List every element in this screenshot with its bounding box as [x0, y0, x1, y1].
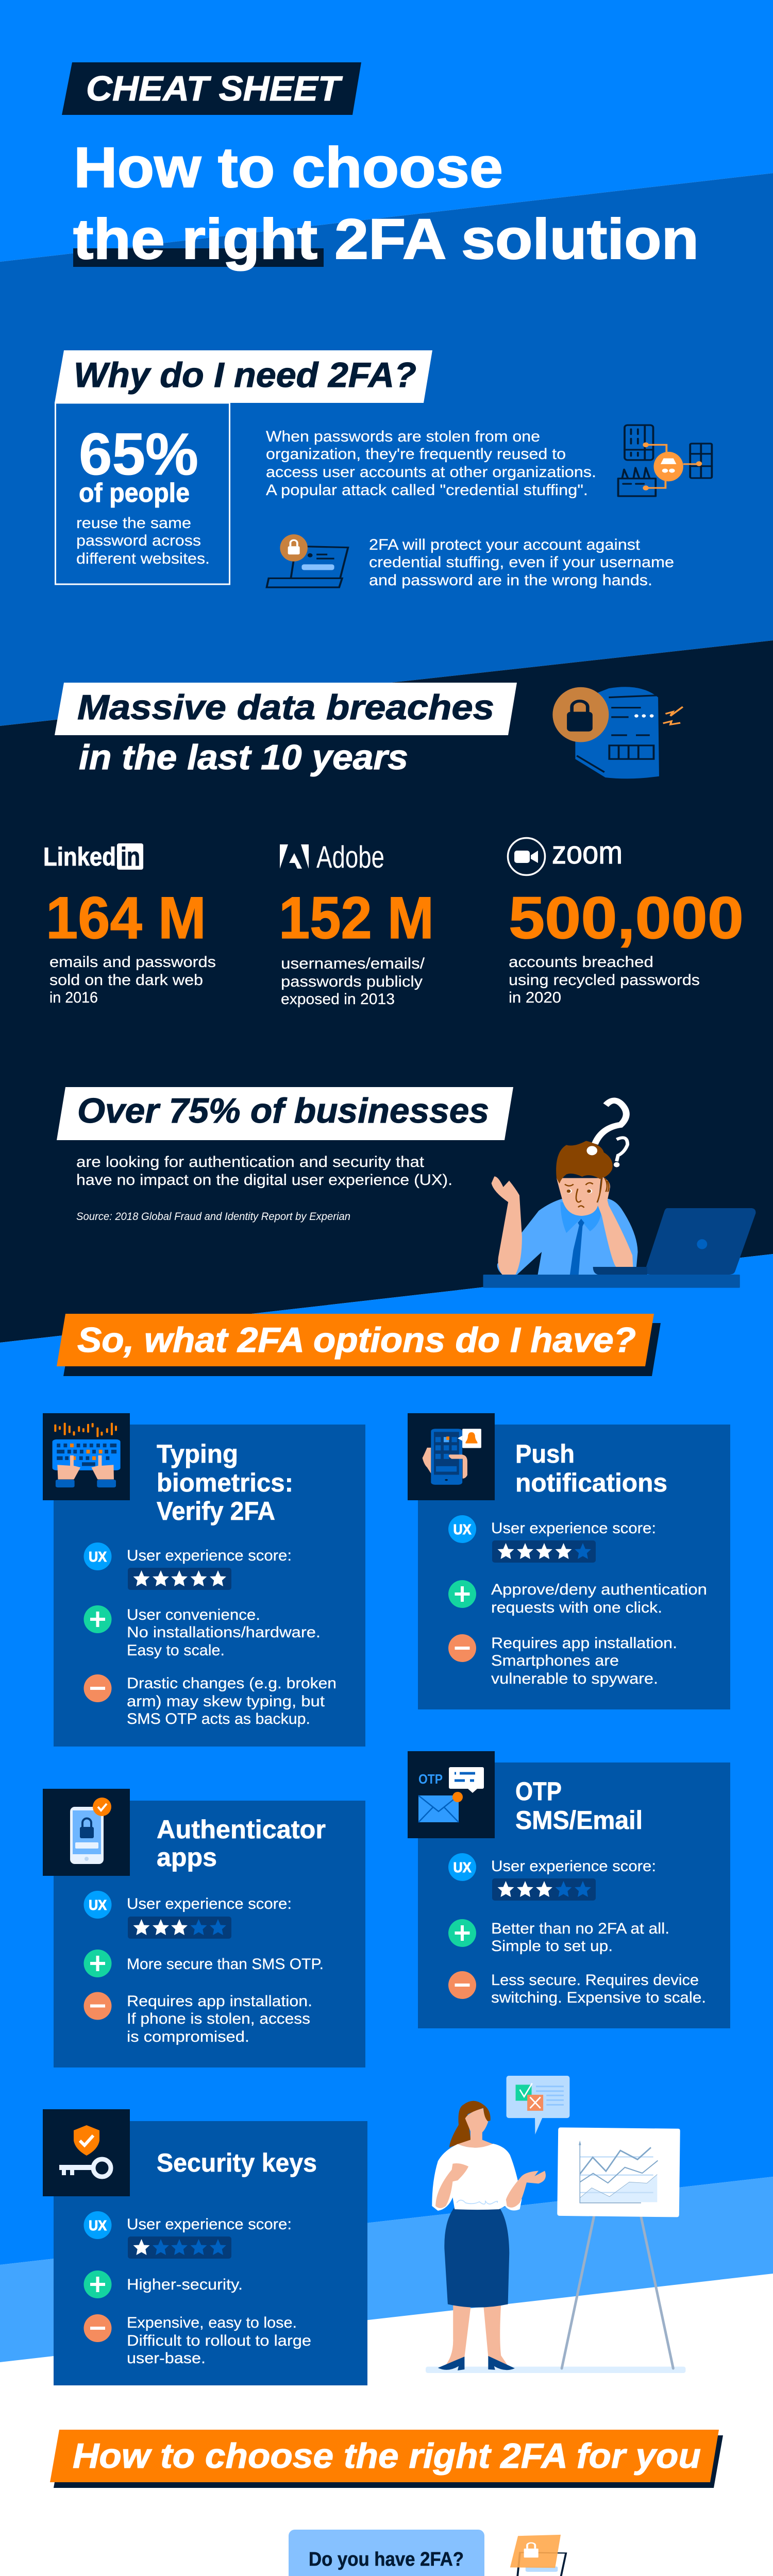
cons	[448, 1971, 706, 2006]
stat: Adobe breach: Adobe	[316, 840, 384, 874]
stat: LinkedIn breach: in 2016	[49, 989, 98, 1006]
stat: Adobe breach	[279, 840, 434, 1008]
title: the right 2FA solution	[73, 208, 699, 271]
card title: Verify 2FA	[157, 1497, 275, 1526]
pros: Simple to set up.	[491, 1938, 613, 1955]
stat: LinkedIn breach: in	[121, 842, 140, 871]
heading: over 75% of businesses: Over 75% of businesses	[77, 1091, 489, 1130]
pros: No installations/hardware.	[127, 1624, 321, 1641]
stat: Adobe breach: usernames/emails/	[281, 955, 425, 972]
stat: Zoom breach: using recycled passwords	[509, 972, 700, 989]
pros: Approve/deny authentication	[491, 1581, 707, 1598]
cons: Difficult to rollout to large	[127, 2332, 311, 2349]
icon: phone with padlock	[43, 1789, 130, 1876]
card title: Authenticator	[157, 1815, 326, 1844]
panel: 65% statistic: 65%	[79, 421, 198, 487]
cons: Drastic changes (e.g. broken	[127, 1675, 337, 1692]
cons: Requires app installation.	[127, 1993, 312, 2010]
text: 2FA protects accounts: credential stuffing, even if your username	[369, 554, 674, 571]
tag: cheat sheet	[62, 62, 361, 115]
panel: 65% statistic: password across	[76, 532, 201, 549]
icon: laptop with padlock	[267, 534, 348, 587]
pros: Higher-security.	[127, 2276, 243, 2293]
cons	[83, 2314, 311, 2367]
UX score: 3 stars: User experience score:	[491, 1858, 656, 1875]
UX score: 4 stars: UX	[453, 1521, 472, 1537]
UX score: 4 stars: User experience score:	[491, 1520, 656, 1537]
card title	[515, 1439, 667, 1497]
text: 2FA protects accounts	[369, 536, 674, 589]
icon: OTP message and envelope: OTP	[418, 1771, 443, 1787]
icon: locked server	[552, 687, 683, 778]
cons: Smartphones are	[491, 1652, 619, 1669]
UX score: 1 star: UX	[89, 2217, 107, 2233]
heading: how to choose the right 2FA for you	[50, 2430, 723, 2488]
cons: arm) may skew typing, but	[127, 1693, 325, 1710]
heading: 2FA options: So, what 2FA options do I have?	[77, 1320, 636, 1360]
text: credential stuffing explanation: A popular attack called "credential stuffing".	[266, 482, 588, 499]
panel: OTP SMS/Email	[408, 1751, 730, 2028]
cons: switching. Expensive to scale.	[491, 1989, 706, 2006]
cons: vulnerable to spyware.	[491, 1670, 658, 1687]
card title: notifications	[515, 1468, 667, 1497]
stat: Zoom breach: zoom	[552, 835, 623, 871]
panel: 65% statistic: of people	[79, 478, 190, 508]
panel: push notifications	[408, 1413, 730, 1709]
heading: 2FA options	[57, 1314, 661, 1376]
heading: how to choose the right 2FA for you: How to choose the right 2FA for you	[73, 2436, 701, 2476]
pros: More secure than SMS OTP.	[127, 1956, 324, 1973]
text: credential stuffing explanation	[266, 428, 596, 499]
text: credential stuffing explanation: When passwords are stolen from one	[266, 428, 540, 445]
flow node: do you have 2FA	[289, 2530, 484, 2576]
stat: Zoom breach	[508, 835, 744, 1006]
cons: is compromised.	[127, 2028, 249, 2045]
UX score: 3 stars: User experience score:	[127, 1895, 292, 1912]
cons: user-base.	[127, 2350, 206, 2367]
stat: LinkedIn breach: sold on the dark web	[49, 972, 203, 989]
icon: OTP message and envelope	[408, 1751, 495, 1838]
pros: requests with one click.	[491, 1599, 662, 1616]
pros	[83, 1605, 321, 1659]
pros	[448, 1919, 669, 1955]
title: How to choose	[74, 136, 503, 199]
text: credential stuffing explanation: organization, they're frequently reused to	[266, 446, 566, 463]
icon: phone with bell	[408, 1413, 495, 1500]
icon: shield and key	[43, 2109, 130, 2196]
card title: Push	[515, 1439, 575, 1468]
heading: massive data breaches: in the last 10 years	[79, 738, 408, 777]
heading: over 75% of businesses	[57, 1087, 513, 1140]
cons	[448, 1634, 677, 1687]
illustration: woman presenting chart on easel	[426, 2076, 685, 2373]
stat: LinkedIn breach: Linked	[43, 842, 116, 871]
text: businesses want no UX impact: Source: 2018 Global Fraud and Identity Report by Experian	[76, 1211, 350, 1223]
tag: cheat sheet: CHEAT SHEET	[86, 69, 343, 108]
cons: Expensive, easy to lose.	[127, 2314, 297, 2331]
panel: typing biometrics	[43, 1413, 365, 1747]
text: 2FA protects accounts: and password are in the wrong hands.	[369, 572, 652, 589]
text: 2FA protects accounts: 2FA will protect your account against	[369, 536, 641, 553]
card title: biometrics:	[157, 1468, 293, 1497]
card title: apps	[157, 1843, 217, 1872]
text: businesses want no UX impact: are looking for authentication and security that	[76, 1154, 425, 1171]
cons: Requires app installation.	[491, 1635, 677, 1652]
card title: OTP	[515, 1777, 562, 1806]
stat: LinkedIn breach	[43, 842, 216, 1006]
UX score: 1 star	[83, 2211, 292, 2259]
heading: why do I need 2FA: Why do I need 2FA?	[74, 355, 416, 395]
icon: hands typing on keyboard	[43, 1413, 130, 1500]
cons	[83, 1674, 337, 1727]
UX score: 5 stars	[83, 1543, 292, 1590]
cons	[83, 1992, 312, 2045]
UX score: 5 stars: UX	[89, 1549, 107, 1565]
cons: SMS OTP acts as backup.	[127, 1710, 310, 1727]
stat: Zoom breach: in 2020	[509, 989, 561, 1006]
text: credential stuffing explanation: access user accounts at other organizations.	[266, 464, 596, 481]
panel: 65% statistic: different websites.	[76, 550, 210, 567]
cons: Less secure. Requires device	[491, 1972, 699, 1989]
illustration: confused man at laptop	[483, 1100, 755, 1288]
title	[73, 136, 699, 271]
pros: User convenience.	[127, 1606, 260, 1623]
UX score: 4 stars	[448, 1515, 656, 1563]
stat: LinkedIn breach: emails and passwords	[49, 954, 216, 971]
card title	[157, 1815, 326, 1872]
pros: Better than no 2FA at all.	[491, 1920, 669, 1937]
pros: Easy to scale.	[127, 1642, 225, 1659]
UX score: 3 stars	[448, 1853, 656, 1901]
panel: security keys	[43, 2109, 367, 2385]
UX score: 1 star: User experience score:	[127, 2216, 292, 2233]
icon: hacker connected to organizations	[618, 425, 712, 496]
panel: 65% statistic	[56, 403, 230, 584]
card title	[515, 1777, 643, 1835]
heading: why do I need 2FA	[55, 350, 432, 403]
card title	[157, 1439, 293, 1526]
text: businesses want no UX impact: have no impact on the digital user experience (UX).	[76, 1172, 452, 1189]
text: businesses want no UX impact	[76, 1154, 452, 1223]
pros	[448, 1580, 707, 1616]
card title: SMS/Email	[515, 1806, 643, 1835]
UX score: 3 stars: UX	[89, 1897, 107, 1913]
stat: Zoom breach: accounts breached	[509, 954, 653, 971]
panel: 65% statistic: reuse the same	[76, 515, 191, 532]
pros	[83, 1950, 324, 1977]
card title: Typing	[157, 1439, 238, 1468]
stat: Zoom breach: 500,000	[509, 885, 744, 951]
icon: monitor with padlock	[510, 2535, 566, 2576]
UX score: 3 stars	[83, 1891, 292, 1939]
flow node: do you have 2FA: Do you have 2FA?	[309, 2549, 464, 2570]
cons: If phone is stolen, access	[127, 2010, 310, 2027]
stat: Adobe breach: 152 M	[279, 885, 434, 951]
card title: Security keys	[157, 2148, 317, 2177]
pros	[83, 2270, 243, 2298]
stat: Adobe breach: exposed in 2013	[281, 991, 395, 1008]
heading: massive data breaches: Massive data breaches	[77, 688, 494, 727]
UX score: 3 stars: UX	[453, 1859, 472, 1875]
stat: Adobe breach: passwords publicly	[281, 973, 423, 990]
UX score: 5 stars: User experience score:	[127, 1547, 292, 1564]
stat: LinkedIn breach: 164 M	[46, 885, 206, 951]
panel: authenticator apps	[43, 1789, 365, 2067]
heading: massive data breaches	[55, 683, 517, 777]
